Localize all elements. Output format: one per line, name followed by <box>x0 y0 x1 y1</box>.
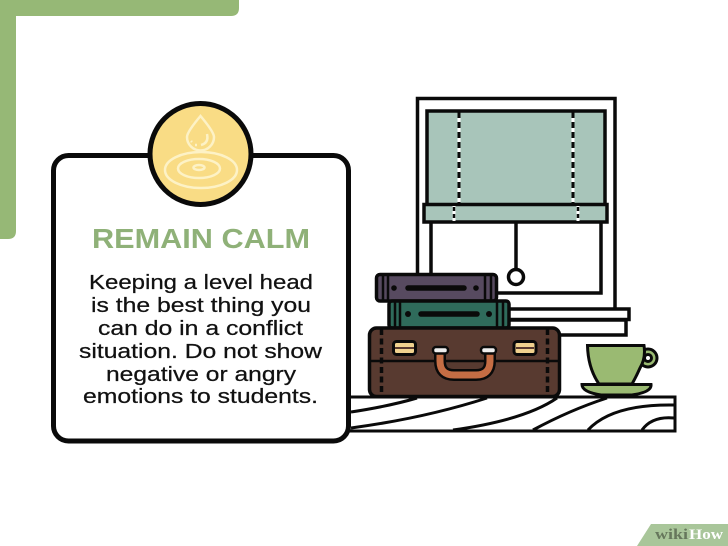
suitcase <box>370 328 560 396</box>
suitcase handle <box>433 347 496 375</box>
suitcase clasps <box>394 342 536 354</box>
window illustration <box>418 98 629 335</box>
green book <box>389 301 509 328</box>
green corner frame <box>0 0 239 239</box>
heading: REMAIN CALM <box>92 223 310 254</box>
wikiHow logo: How <box>689 527 723 543</box>
wikiHow logo: wiki <box>655 527 688 543</box>
body text: negative or angry <box>106 363 297 386</box>
body text: Keeping a level head <box>89 271 313 294</box>
purple book <box>376 274 496 301</box>
roller blind <box>424 111 607 222</box>
wikiHow logo <box>637 524 728 546</box>
icon: water drop with ripples <box>150 104 251 204</box>
shelf <box>340 397 675 431</box>
body text: can do in a conflict <box>98 317 303 340</box>
coffee cup and saucer <box>582 346 657 395</box>
window outer frame <box>418 98 615 310</box>
window inner pane <box>431 220 601 293</box>
window sill <box>490 309 629 335</box>
body text: emotions to students. <box>83 385 318 408</box>
blind cord and ring <box>508 223 524 284</box>
body text <box>79 271 322 408</box>
body text: situation. Do not show <box>79 340 322 363</box>
body text: is the best thing you <box>91 294 311 317</box>
text card <box>54 156 348 441</box>
